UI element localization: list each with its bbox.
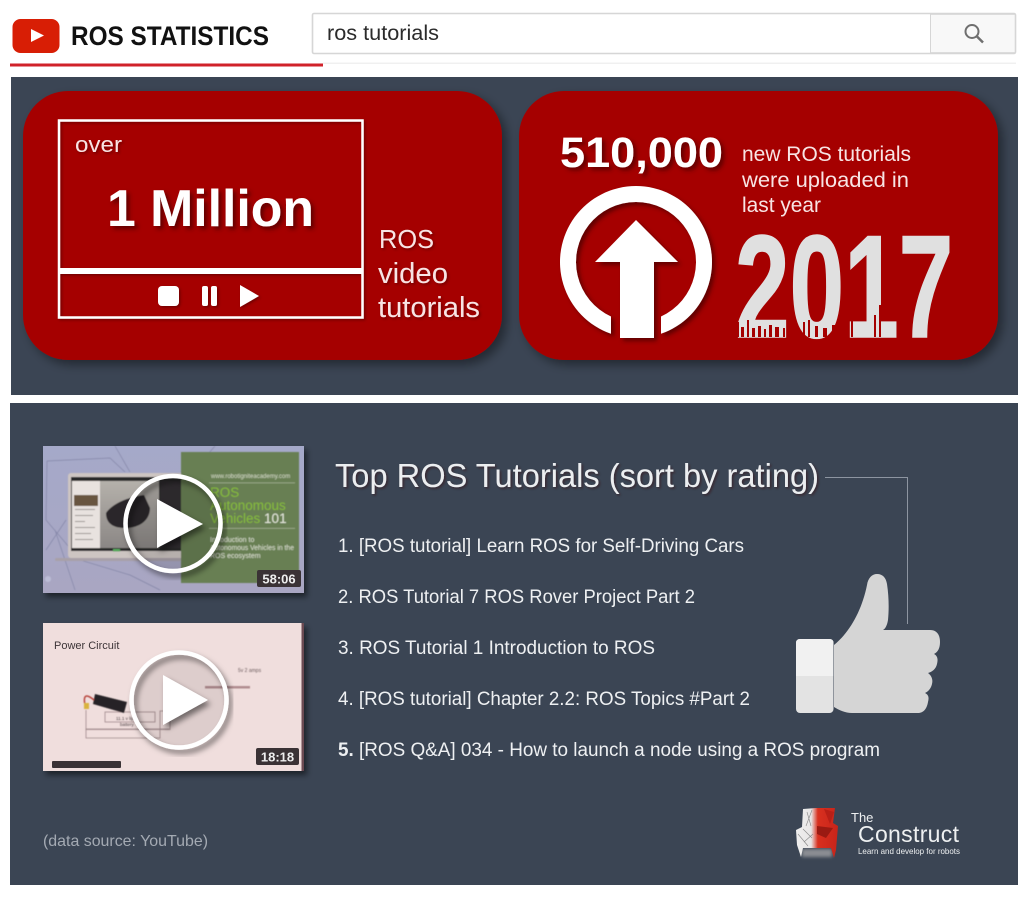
circuit diagram — [84, 668, 262, 738]
connector line — [825, 478, 908, 624]
distressed texture — [737, 300, 947, 337]
green title panel: Vehicles 101 — [210, 511, 287, 526]
caption: ROS video tutorials: ROS — [379, 224, 434, 254]
duration badge — [256, 748, 299, 765]
ranked list: 3. ROS Tutorial 1 Introduction to ROS — [338, 638, 655, 659]
slide title: Power Circuit — [54, 640, 119, 652]
player toolbar — [52, 761, 121, 768]
ranked list: 5. [ROS Q&A] 034 - How to launch a node using a ROS program — [338, 740, 880, 761]
green title panel: www.robotigniteacademy.com — [210, 474, 290, 480]
big number: 510,000: 510,000 — [560, 129, 723, 177]
ranked list — [338, 536, 880, 761]
ranked list: 2. ROS Tutorial 7 ROS Rover Project Part 2 — [338, 587, 695, 608]
caption: new tutorials — [741, 143, 911, 217]
heading: Top ROS Tutorials (sort by rating) — [335, 457, 819, 494]
page header — [10, 14, 1016, 66]
duration badge — [257, 570, 301, 587]
circuit diagram: battery — [120, 722, 135, 727]
panel: top tutorials — [10, 403, 1018, 885]
wordmark: Construct — [858, 821, 960, 847]
green title panel: Introduction to — [210, 537, 254, 544]
duration badge: 58:06 — [262, 572, 296, 586]
player controls — [158, 285, 259, 307]
search bar — [312, 14, 1016, 64]
circuit diagram: 11.1 v lipo — [116, 716, 137, 721]
icon: magnifier — [966, 25, 983, 42]
header underline — [10, 64, 323, 66]
green title panel: Autonomous — [210, 498, 286, 513]
title: ROS STATISTICS — [71, 21, 269, 51]
caption: ROS video tutorials: tutorials — [378, 292, 480, 324]
circuit diagram: 5v 2 amps — [238, 668, 262, 674]
ranked list: 4. [ROS tutorial] Chapter 2.2: ROS Topics #Part 2 — [338, 689, 750, 710]
card: new uploads in 2017 — [519, 91, 998, 369]
green title panel — [181, 452, 299, 583]
panel: statistics — [11, 77, 1018, 395]
icon: upload arrow in ring — [560, 186, 712, 338]
ranked list: 1. [ROS tutorial] Learn ROS for Self-Driving Cars — [338, 536, 744, 557]
video player frame — [59, 120, 363, 318]
year: 2017: 2017 — [735, 206, 953, 369]
wordmark: The — [851, 810, 873, 825]
caption: new tutorials: new ROS tutorials — [742, 143, 911, 166]
caption: ROS video tutorials — [378, 224, 480, 324]
data source note: (data source: YouTube) — [43, 833, 208, 850]
caption: new tutorials: were uploaded in — [741, 169, 909, 192]
play button — [132, 652, 226, 748]
network background — [46, 446, 215, 590]
logo: The Construct — [796, 808, 960, 858]
icon: armchair — [796, 808, 838, 858]
icon: thumbs up — [796, 574, 940, 713]
wordmark: Learn and develop for robots — [858, 846, 960, 856]
card: one million videos — [23, 91, 502, 360]
play button — [126, 476, 220, 571]
green title panel: ROS ecosystem — [210, 553, 261, 560]
laptop — [55, 472, 182, 562]
thumbnail: Autonomous Vehicles 101 — [43, 446, 304, 593]
caption: ROS video tutorials: video — [378, 258, 448, 290]
green title panel: Autonomous Vehicles in the — [210, 545, 294, 552]
big number: 1 Million: 1 Million — [107, 180, 314, 238]
duration badge: 18:18 — [261, 750, 294, 764]
icon: video logo — [12, 19, 60, 53]
thumbnail: Power Circuit — [43, 623, 304, 771]
green title panel: ROS — [210, 485, 239, 500]
search query: ros tutorials — [327, 22, 439, 45]
label: over: over — [75, 132, 122, 157]
wordmark — [851, 810, 960, 856]
caption: new tutorials: last year — [742, 194, 821, 217]
